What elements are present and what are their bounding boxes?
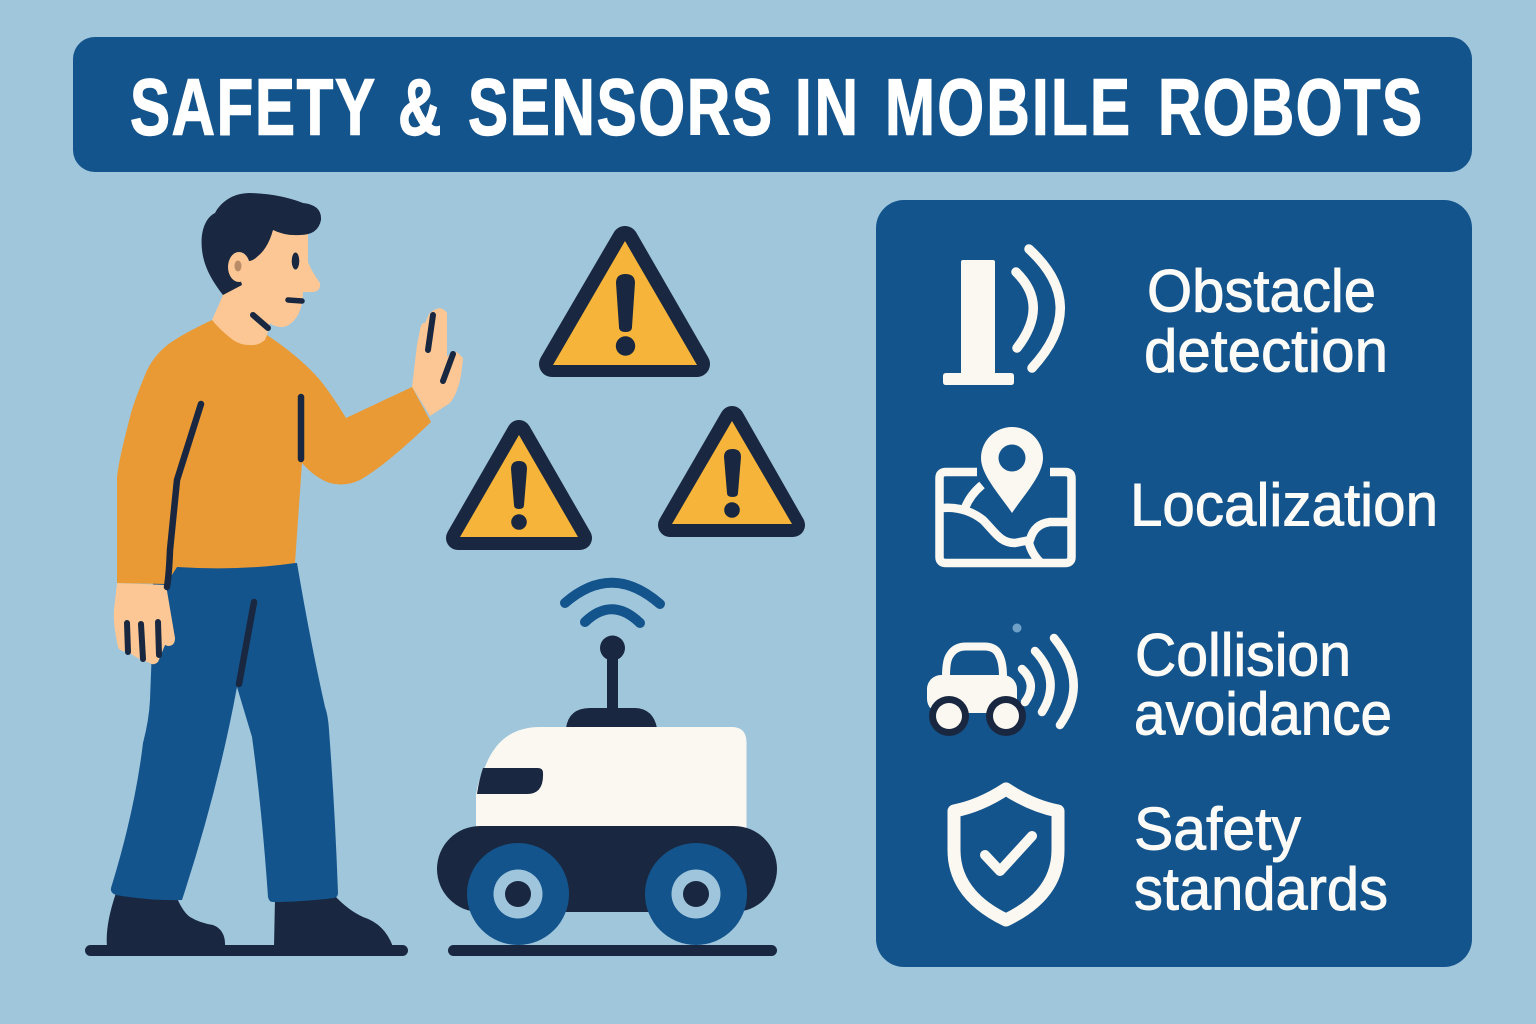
trouser crease — [239, 602, 254, 684]
warning triangle top — [552, 239, 697, 365]
warning triangles — [458, 239, 793, 538]
wifi signal arcs — [565, 583, 660, 623]
ground line under robot — [448, 945, 777, 956]
ground line under person — [85, 945, 408, 956]
label: obstacle detection: detection — [1144, 318, 1388, 384]
sweater fold lines — [167, 397, 301, 587]
icon: car with signal waves — [927, 624, 1074, 736]
lower hand — [114, 583, 175, 664]
raised hand — [412, 308, 463, 416]
robot visor — [477, 768, 543, 794]
hair — [202, 193, 321, 295]
title text: & — [398, 62, 441, 151]
title text: IN — [795, 62, 858, 151]
title text: ROBOTS — [1158, 62, 1422, 151]
icon: shield with check — [954, 789, 1058, 920]
robot body — [476, 727, 746, 830]
title text: SAFETY — [130, 62, 375, 151]
chin line — [253, 315, 268, 328]
ear — [228, 252, 250, 282]
label: collision avoidance: avoidance — [1134, 680, 1392, 748]
finger lines — [428, 315, 453, 381]
title banner — [73, 37, 1472, 172]
icon: map with pin — [940, 427, 1072, 563]
person figure — [85, 193, 463, 956]
right wheel — [645, 843, 747, 945]
panel: sensors and safety features — [876, 200, 1472, 967]
eye — [292, 252, 299, 270]
title text: MOBILE — [885, 62, 1130, 151]
icon: obstacle sensor — [943, 249, 1060, 385]
hand finger lines — [127, 622, 159, 659]
sweater — [117, 320, 431, 584]
label: obstacle detection: Obstacle — [1147, 258, 1376, 324]
left wheel — [467, 843, 569, 945]
label: localization: Localization — [1130, 472, 1438, 538]
trousers — [111, 563, 338, 902]
mouth — [288, 300, 302, 301]
robot — [437, 583, 777, 956]
tracks — [437, 826, 777, 912]
label: safety standards: standards — [1134, 856, 1388, 922]
antenna — [566, 636, 657, 728]
neck and face — [212, 230, 320, 345]
warning triangle left — [458, 432, 580, 538]
label: collision avoidance: Collision — [1135, 622, 1351, 688]
warning triangle right — [670, 418, 793, 525]
label: safety standards: Safety — [1134, 796, 1301, 862]
title text: SENSORS — [468, 62, 772, 151]
left shoe — [107, 893, 225, 947]
right shoe — [274, 896, 393, 947]
